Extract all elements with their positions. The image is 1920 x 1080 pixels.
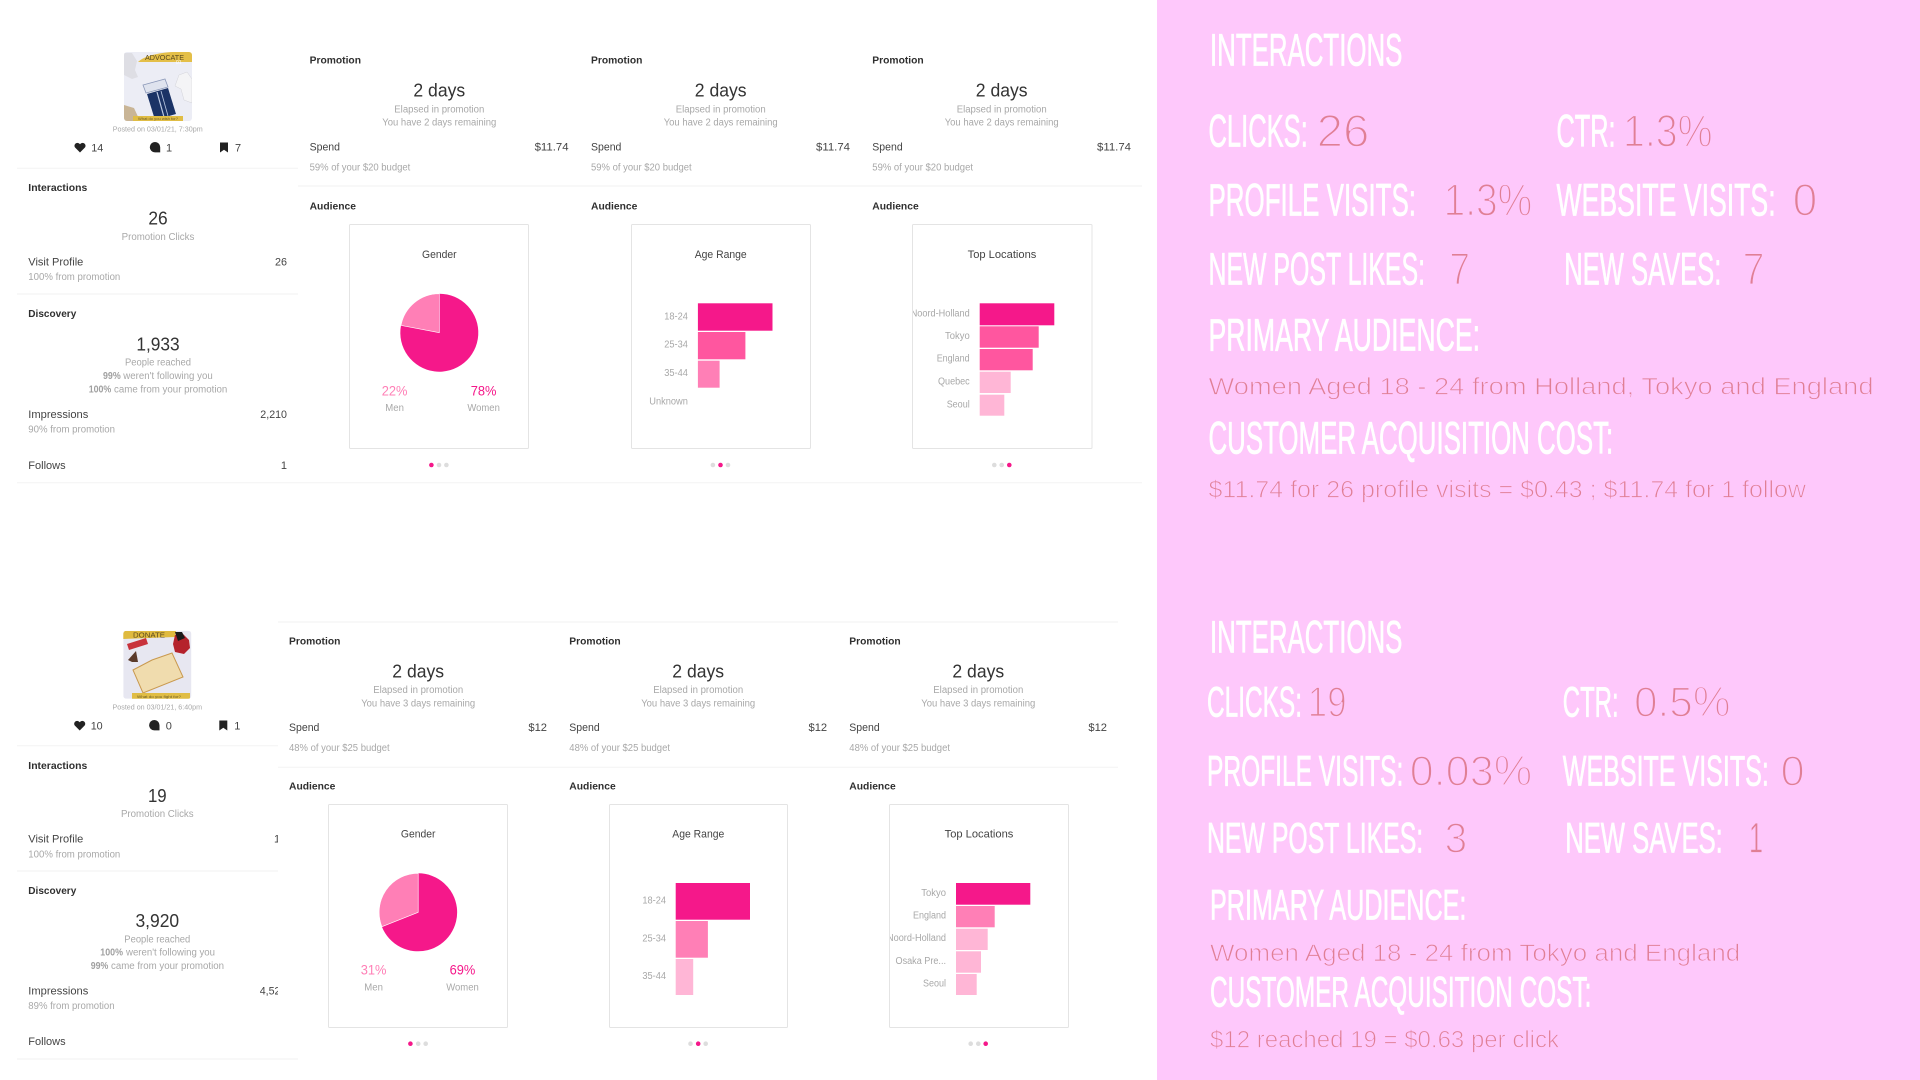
metric: days elapsed: 2 days (413, 81, 465, 101)
stat: clicks: 19 (1308, 680, 1347, 727)
column: gender promotion view (289, 635, 547, 1046)
panel: post one insights (17, 52, 1142, 483)
row: visit profile: Visit Profile (28, 833, 83, 845)
metric: days elapsed: You have 2 days remaining (664, 118, 778, 129)
icon: heart (74, 143, 86, 152)
stat: website visits: WEBSITE VISITS: (1556, 175, 1776, 226)
metric: people reached: People reached (125, 358, 191, 369)
legend: women: 69% (450, 962, 475, 978)
metric: days elapsed (945, 81, 1059, 129)
bar chart: age range: 35-44 (664, 368, 688, 379)
metric: people reached: came from your promotion (111, 961, 224, 972)
bar chart: top locations: Seoul (947, 399, 970, 410)
card: top locations (911, 224, 1092, 448)
row: visit profile (28, 256, 287, 283)
metric: days elapsed (641, 662, 755, 709)
metric: days elapsed: 2 days (976, 81, 1028, 101)
metric: people reached: 3,920 (135, 911, 179, 931)
row: spend: $12 (1088, 722, 1107, 734)
card: age range: Age Range (695, 249, 747, 261)
row: visit profile: 19 (274, 833, 286, 845)
metric: days elapsed: Elapsed in promotion (653, 685, 743, 696)
bar chart: age range: 35-44 (642, 971, 666, 982)
metric: days elapsed: Elapsed in promotion (394, 104, 484, 115)
stat: new post likes (1208, 243, 1470, 294)
row: spend: $11.74 (1097, 142, 1131, 154)
heading: promotion: Promotion (591, 55, 642, 67)
carousel dots (711, 463, 730, 467)
bar chart: top locations: Noord-Holland (911, 308, 970, 319)
metric: days elapsed: You have 2 days remaining (382, 118, 496, 129)
row: impressions (28, 986, 278, 1011)
row: spend: Spend (872, 142, 903, 154)
row: spend: Spend (289, 722, 319, 734)
legend: men: 22% (382, 383, 407, 399)
heading: discovery: Discovery (28, 885, 76, 897)
row: impressions: 4,521 (260, 985, 286, 997)
icon: bookmark (220, 142, 228, 152)
row: visit profile: 26 (275, 256, 287, 268)
row: follows: Follows (28, 460, 66, 472)
likes count: 14 (91, 143, 103, 155)
comments count: 0 (166, 720, 172, 732)
row: visit profile: 100% from promotion (28, 272, 120, 283)
stat: profile visits: PROFILE VISITS: (1207, 749, 1403, 796)
panel: post one results (1208, 25, 1874, 503)
stat: website visits (1563, 749, 1805, 796)
row: visit profile: Visit Profile (28, 256, 83, 268)
bar chart: age range: 18-24 (664, 311, 688, 322)
comments count: 1 (166, 143, 172, 155)
saves count: 1 (234, 720, 240, 732)
metric: days elapsed (921, 662, 1035, 709)
likes count: 10 (91, 720, 103, 732)
heading: customer acquisition cost: CUSTOMER ACQUISITION COST: (1208, 412, 1613, 463)
heading: audience: Audience (591, 201, 638, 213)
carousel dots (992, 463, 1012, 467)
bar chart: age range (642, 883, 750, 995)
row: follows: 1 (281, 460, 287, 472)
metric: people reached: weren't following you (122, 371, 213, 382)
metric: promotion clicks: Promotion Clicks (121, 809, 194, 820)
row: spend: Spend (591, 142, 621, 154)
metric: people reached: weren't following you (125, 948, 215, 959)
icon: heart (74, 721, 85, 730)
stat: new post likes: NEW POST LIKES: (1208, 243, 1425, 294)
thumbnail: donate post: DONATE (133, 632, 165, 640)
bar chart: top locations: Tokyo (945, 331, 970, 342)
row: spend (849, 722, 1107, 754)
legend: women: 78% (471, 383, 496, 399)
row: spend (289, 722, 547, 754)
heading: promotion: Promotion (849, 635, 901, 647)
text: acquisition cost detail: $12 reached 19 = $0.63 per click (1210, 1027, 1560, 1054)
thumbnail: advocate post: What do you wish for? (138, 117, 178, 121)
stat: new saves: NEW SAVES: (1564, 243, 1721, 294)
row: spend: 59% of your $20 budget (872, 162, 973, 173)
metric: people reached (91, 911, 224, 972)
thumbnail: donate post (123, 631, 191, 699)
metric: people reached: 1,933 (136, 335, 180, 355)
stat: ctr (1563, 680, 1730, 727)
text: acquisition cost detail: $11.74 for 26 profile visits = $0.43 ; $11.74 for 1 follow (1208, 476, 1807, 503)
card: top locations: Top Locations (945, 829, 1014, 841)
heading: audience: Audience (289, 781, 336, 793)
column: top locations promotion view (849, 635, 1107, 1046)
metric: days elapsed: You have 3 days remaining (641, 698, 755, 709)
metric: promotion clicks (122, 209, 194, 243)
heading: discovery: Discovery (28, 308, 76, 320)
heading: audience: Audience (310, 201, 356, 213)
column: top locations promotion view (872, 55, 1131, 467)
stat: new post likes: NEW POST LIKES: (1207, 816, 1423, 863)
row: spend: Spend (569, 722, 600, 734)
stat: profile visits: PROFILE VISITS: (1208, 175, 1416, 226)
stat: website visits: WEBSITE VISITS: (1563, 749, 1769, 796)
metric: promotion clicks: 26 (148, 209, 168, 229)
bar chart: age range: 18-24 (642, 896, 666, 907)
carousel dots (408, 1041, 428, 1046)
stat: ctr: CTR: (1556, 106, 1616, 157)
metric: people reached: 99% (103, 371, 121, 382)
metric: days elapsed: Elapsed in promotion (373, 685, 463, 696)
stat: website visits: 0 (1793, 175, 1817, 226)
stat: new post likes: 7 (1449, 243, 1470, 294)
bar chart: top locations: Noord-Holland (887, 933, 946, 944)
metric: days elapsed: You have 2 days remaining (945, 118, 1059, 129)
pie chart: gender split (379, 873, 457, 951)
row: spend: Spend (310, 142, 340, 154)
stat: clicks: 26 (1317, 106, 1369, 157)
metric: days elapsed (664, 81, 778, 129)
legend: men: Men (385, 403, 404, 414)
carousel dots (968, 1041, 988, 1046)
stat: new post likes: 3 (1444, 816, 1467, 863)
sidebar: post two summary (17, 631, 298, 1059)
stat: ctr (1556, 106, 1713, 157)
metric: days elapsed: You have 3 days remaining (361, 698, 475, 709)
bar chart: age range (649, 303, 772, 407)
bar chart: top locations: Osaka Pre... (896, 956, 946, 967)
metric: days elapsed: 2 days (695, 81, 747, 101)
post date: Posted on 03/01/21, 7:30pm (113, 125, 203, 134)
row: spend: 48% of your $25 budget (289, 743, 390, 754)
heading: promotion: Promotion (569, 635, 621, 647)
metric: people reached (89, 335, 227, 395)
row: spend: 59% of your $20 budget (591, 162, 692, 173)
row: impressions: 90% from promotion (28, 425, 115, 436)
stat: ctr: 0.5% (1634, 680, 1730, 727)
bar chart: top locations: England (913, 911, 946, 922)
stat: clicks: CLICKS: (1208, 106, 1308, 157)
row: impressions: 2,210 (260, 409, 287, 421)
heading: audience: Audience (849, 781, 896, 793)
heading: promotion: Promotion (289, 635, 340, 647)
card: top locations (887, 804, 1068, 1028)
bar chart: top locations (887, 883, 1030, 995)
stat: clicks: CLICKS: (1207, 680, 1302, 727)
row: spend: $11.74 (535, 142, 569, 154)
heading: interactions: INTERACTIONS (1210, 25, 1402, 76)
stat: new saves: 7 (1743, 243, 1764, 294)
bar chart: age range: 25-34 (642, 933, 666, 944)
metric: days elapsed: Elapsed in promotion (676, 104, 766, 115)
metric: days elapsed: Elapsed in promotion (933, 685, 1023, 696)
legend: men (361, 962, 386, 993)
metric: days elapsed: 2 days (392, 662, 444, 682)
stat: new saves: NEW SAVES: (1565, 816, 1723, 863)
heading: audience: Audience (569, 781, 616, 793)
row: spend (569, 722, 827, 754)
bar chart: top locations: Seoul (923, 979, 946, 990)
row: spend: 48% of your $25 budget (849, 743, 950, 754)
heading: interactions: Interactions (28, 760, 87, 772)
row: spend: $12 (808, 722, 827, 734)
card: gender (328, 804, 508, 1028)
stat: website visits: 0 (1780, 749, 1805, 796)
heading: customer acquisition cost: CUSTOMER ACQUISITION COST: (1210, 970, 1591, 1017)
row: spend: Spend (849, 722, 880, 734)
row: spend: 59% of your $20 budget (310, 162, 410, 173)
stat: profile visits: 1.3% (1444, 175, 1532, 226)
row: impressions: Impressions (28, 409, 89, 421)
icon: comment (149, 720, 160, 730)
saves count: 7 (235, 143, 241, 155)
legend: women: Women (446, 982, 479, 993)
row: spend: 48% of your $25 budget (569, 743, 670, 754)
row: follows (28, 460, 287, 472)
card: gender (350, 224, 528, 448)
icon: bookmark (219, 720, 227, 730)
carousel dots (429, 463, 449, 467)
panel: pink results background (1157, 0, 1920, 1080)
row: spend (591, 142, 850, 173)
metric: days elapsed (361, 662, 475, 709)
metric: days elapsed: Elapsed in promotion (957, 104, 1047, 115)
stat: ctr: 1.3% (1623, 106, 1713, 157)
sidebar: post one summary (17, 52, 1142, 483)
column: gender promotion view (310, 55, 569, 467)
stat: new saves: 1 (1749, 816, 1763, 863)
bar chart: top locations: England (937, 354, 970, 365)
heading: primary audience: PRIMARY AUDIENCE: (1210, 882, 1466, 929)
heading: interactions: INTERACTIONS (1210, 612, 1402, 663)
text: primary audience detail: Women Aged 18 - 24 from Tokyo and England (1210, 940, 1740, 967)
bar chart: top locations (911, 303, 1054, 416)
row: visit profile (28, 834, 278, 860)
thumbnail: advocate post: ADVOCATE (145, 55, 184, 62)
metric: promotion clicks: Promotion Clicks (122, 232, 194, 243)
row: spend: $12 (528, 722, 547, 734)
thumbnail: donate post: What do you fight for? (137, 695, 181, 699)
metric: days elapsed: 2 days (672, 662, 724, 682)
card: age range (610, 804, 788, 1028)
legend: women (467, 383, 500, 414)
stat: ctr: CTR: (1563, 680, 1619, 727)
row: visit profile: 100% from promotion (28, 849, 120, 860)
metric: people reached: People reached (124, 934, 190, 945)
post date: Posted on 03/01/21, 6:40pm (113, 703, 202, 712)
metric: people reached: 100% (89, 384, 111, 395)
card: age range (632, 224, 810, 448)
metric: promotion clicks: 19 (148, 786, 167, 806)
thumbnail: advocate post (124, 52, 192, 121)
metric: days elapsed: 2 days (952, 662, 1004, 682)
card: gender: Gender (422, 249, 457, 261)
row: impressions: 89% from promotion (28, 1001, 115, 1012)
row: spend: $11.74 (816, 142, 850, 154)
row: follows: Follows (28, 1036, 66, 1048)
legend: women: Women (467, 403, 500, 414)
heading: primary audience: PRIMARY AUDIENCE: (1208, 310, 1480, 361)
heading: interactions: Interactions (28, 182, 87, 194)
thumbnail: advocate post: 01 (176, 60, 182, 66)
row: impressions: Impressions (28, 985, 89, 997)
legend: men: Men (364, 982, 383, 993)
metric: promotion clicks (121, 786, 194, 820)
legend: women (446, 962, 479, 993)
text: primary audience detail: Women Aged 18 - 24 from Holland, Tokyo and England (1208, 373, 1874, 400)
card: age range: Age Range (672, 829, 724, 841)
card: gender: Gender (401, 829, 436, 841)
metric: people reached: 99% (91, 961, 108, 972)
row: impressions (28, 409, 287, 436)
card: top locations: Top Locations (968, 249, 1037, 261)
panel: post two insights (17, 622, 1118, 1059)
row: spend (872, 142, 1131, 173)
panel: post two results (1207, 612, 1805, 1054)
metric: days elapsed: You have 3 days remaining (921, 698, 1035, 709)
bar chart: top locations: Tokyo (921, 888, 946, 899)
metric: people reached: came from your promotion (114, 384, 227, 395)
carousel dots (688, 1041, 708, 1046)
pie chart: gender split (400, 294, 478, 372)
icon: comment (150, 142, 160, 152)
bar chart: age range: Unknown (649, 396, 688, 407)
legend: men: 31% (361, 962, 386, 978)
bar chart: top locations: Quebec (938, 376, 970, 387)
column: age range promotion view (569, 635, 827, 1046)
metric: people reached: 100% (100, 948, 123, 959)
stat: profile visits: 0.03% (1410, 749, 1532, 796)
heading: audience: Audience (872, 201, 919, 213)
heading: promotion: Promotion (310, 55, 361, 67)
column: age range promotion view (591, 55, 850, 467)
heading: promotion: Promotion (872, 55, 924, 67)
metric: days elapsed (382, 81, 496, 129)
row: spend (310, 142, 569, 173)
bar chart: age range: 25-34 (664, 340, 688, 351)
legend: men (382, 383, 407, 414)
